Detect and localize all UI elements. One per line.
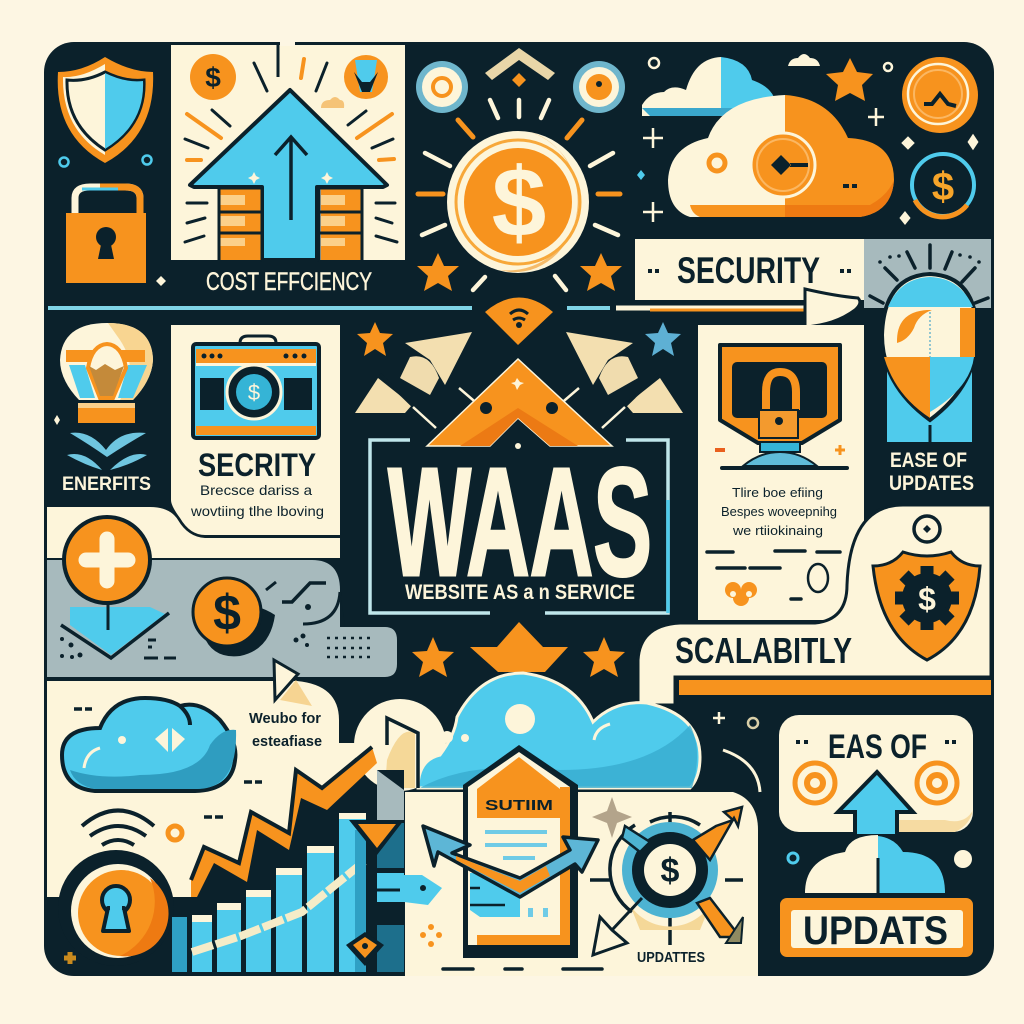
dot rows: [327, 638, 374, 657]
heading: scalabitly: SCALABITLY: [675, 630, 852, 671]
blue block behind balloon: [887, 370, 972, 442]
icon: document tag: SUTIIM: [485, 797, 553, 814]
rays: [418, 120, 620, 194]
panel: bottom centre card: [377, 745, 760, 976]
panel: cost efficiency illustration: [171, 40, 405, 260]
icon: lower crown and stars: [412, 622, 625, 677]
icon: tiny cream cloud: [788, 54, 820, 66]
squiggle: [282, 583, 326, 602]
icon: sun coin: [418, 100, 620, 290]
icon: plus circle: [64, 517, 150, 603]
label: updattes: UPDATTES: [637, 949, 705, 966]
title: WAAS: WAAS: [388, 436, 652, 608]
panel: security card: wovtiing tlhe lboving: [190, 503, 324, 519]
icon: orange clover: [725, 582, 757, 606]
icon: padlock: [66, 187, 146, 283]
icon: keyhole circle: [58, 850, 174, 966]
icon: left kite: [355, 332, 487, 428]
heading: cost efficiency: COST EFFCIENCY: [206, 268, 372, 296]
icon: up arrow: [838, 772, 913, 836]
icon: small cloud: [642, 57, 776, 116]
icon: book leaves: [67, 433, 147, 470]
icon: orange chevron roof: [427, 359, 612, 449]
panel: lock card: Bespes woveepnihg: [721, 504, 837, 519]
icon: wifi signal: [82, 810, 154, 845]
panel: updats button: UPDATS: [803, 909, 948, 953]
icon: right gear: [573, 61, 625, 113]
icons: sparkle marks: [637, 58, 977, 223]
panel: eas of card: EAS OF: [828, 728, 927, 766]
icon: orange ring: [168, 826, 182, 840]
right chart strip: [346, 770, 404, 972]
panel: lower left card: [47, 660, 372, 897]
panel: security banner: SECURITY: [677, 250, 820, 291]
panel: central title frame: [370, 436, 668, 613]
icon: dollar coin: $: [213, 585, 241, 641]
dashes: [74, 709, 262, 817]
icon: right kite: [551, 332, 683, 428]
icon: dollar coin: [193, 578, 276, 656]
panel: lower left card: esteafiase: [252, 733, 322, 750]
icon: star top right: [826, 58, 873, 101]
icon: shield: [58, 57, 153, 163]
icon: central blue cloud: [354, 673, 700, 791]
panel: scalability: [638, 505, 994, 705]
icon: shield coin: [344, 55, 388, 99]
icon: marks: [54, 415, 60, 425]
icon: browser window: [193, 336, 319, 438]
subtitle: WEBSITE AS a n SERVICE: [405, 581, 635, 604]
icon: egg: [808, 564, 828, 592]
icon: lock monitor: [715, 345, 847, 468]
icon: left server stack: [219, 188, 262, 260]
icon: big cloud: [668, 95, 894, 217]
icon: dollar ring: [912, 154, 974, 217]
icon: left gear: [416, 61, 468, 113]
icon: up arrow house: [190, 90, 387, 260]
icon: top chevron: [485, 48, 555, 87]
icon: blue cloud: [62, 698, 236, 791]
panel: eas of card: [779, 715, 973, 836]
panel: security card: SECRITY: [198, 447, 316, 483]
icon: lower cloud: [805, 835, 945, 893]
icon: target coin: [590, 807, 743, 955]
icon: shield with gear: [873, 552, 980, 660]
label: enerfits: ENERFITS: [62, 474, 151, 495]
panel: lower left card: Weubo for: [249, 710, 321, 727]
rays: [185, 63, 397, 242]
icon: targets: [795, 763, 957, 803]
icon: pointer: [274, 660, 312, 706]
icon: balloon shield: [870, 245, 988, 442]
icon: small gold gear: [64, 952, 76, 964]
icon: dollar ring: $: [932, 165, 954, 209]
icon: document tag: [463, 745, 578, 958]
grey tab behind balloon: [864, 239, 991, 308]
icon: shield with gear: $: [918, 581, 936, 617]
panel: lock card: [698, 325, 864, 620]
bar chart: [172, 813, 366, 972]
panel: security banner: [635, 239, 864, 300]
icon: tan star: [592, 797, 632, 838]
panel: lock card: we rtiiokinaing: [732, 523, 823, 538]
icon: small diamond: [156, 276, 166, 286]
icon: orange ring badge: [902, 57, 978, 133]
icon: dollar coin: $: [205, 62, 221, 93]
icon: blue down diamond: [61, 604, 169, 658]
icon: header stars: [357, 322, 681, 356]
orange bar: [679, 680, 991, 695]
icon: browser window: $: [248, 380, 260, 405]
dashes: [443, 967, 602, 971]
heading: ease of updates: UPDATES: [889, 472, 974, 495]
icon: ring: [914, 516, 940, 542]
icon: light bulb: [60, 323, 153, 423]
panel: updats button: [780, 898, 973, 957]
heading: ease of updates: EASE OF: [890, 449, 967, 472]
icon: cream dot: [954, 850, 972, 868]
icon: tan arrow: [385, 718, 418, 788]
icon: small rings: [60, 156, 152, 166]
icon: stars under sun: [417, 253, 622, 291]
divider lines: [48, 308, 805, 310]
icons: sparkle marks: [713, 712, 798, 863]
dash marks: [144, 640, 176, 658]
panel: security card: Brecsce dariss a: [200, 482, 312, 498]
zigzag outline: [191, 747, 372, 880]
icon: sun coin: $: [492, 147, 546, 257]
icon: dollar coin: [190, 54, 236, 100]
blue connector arrow: [377, 873, 442, 905]
zigzag trend arrow: [191, 747, 377, 897]
icon: swoosh arrow: [423, 826, 598, 897]
icon: right server stack: [319, 188, 362, 260]
icon: orange dots: [420, 924, 442, 947]
icon: pennant arrow: [805, 289, 860, 327]
panel: lock card: Tlire boe efiing: [732, 485, 823, 500]
panel: security card: [171, 325, 340, 535]
icon: wifi fan: [485, 298, 553, 345]
icon: target coin: $: [661, 852, 680, 890]
heading: ease of updates: [889, 449, 974, 495]
panel: grey block: [47, 517, 397, 677]
icon: small cloud mark: [321, 97, 344, 108]
panel: lower left strip: [47, 507, 340, 558]
